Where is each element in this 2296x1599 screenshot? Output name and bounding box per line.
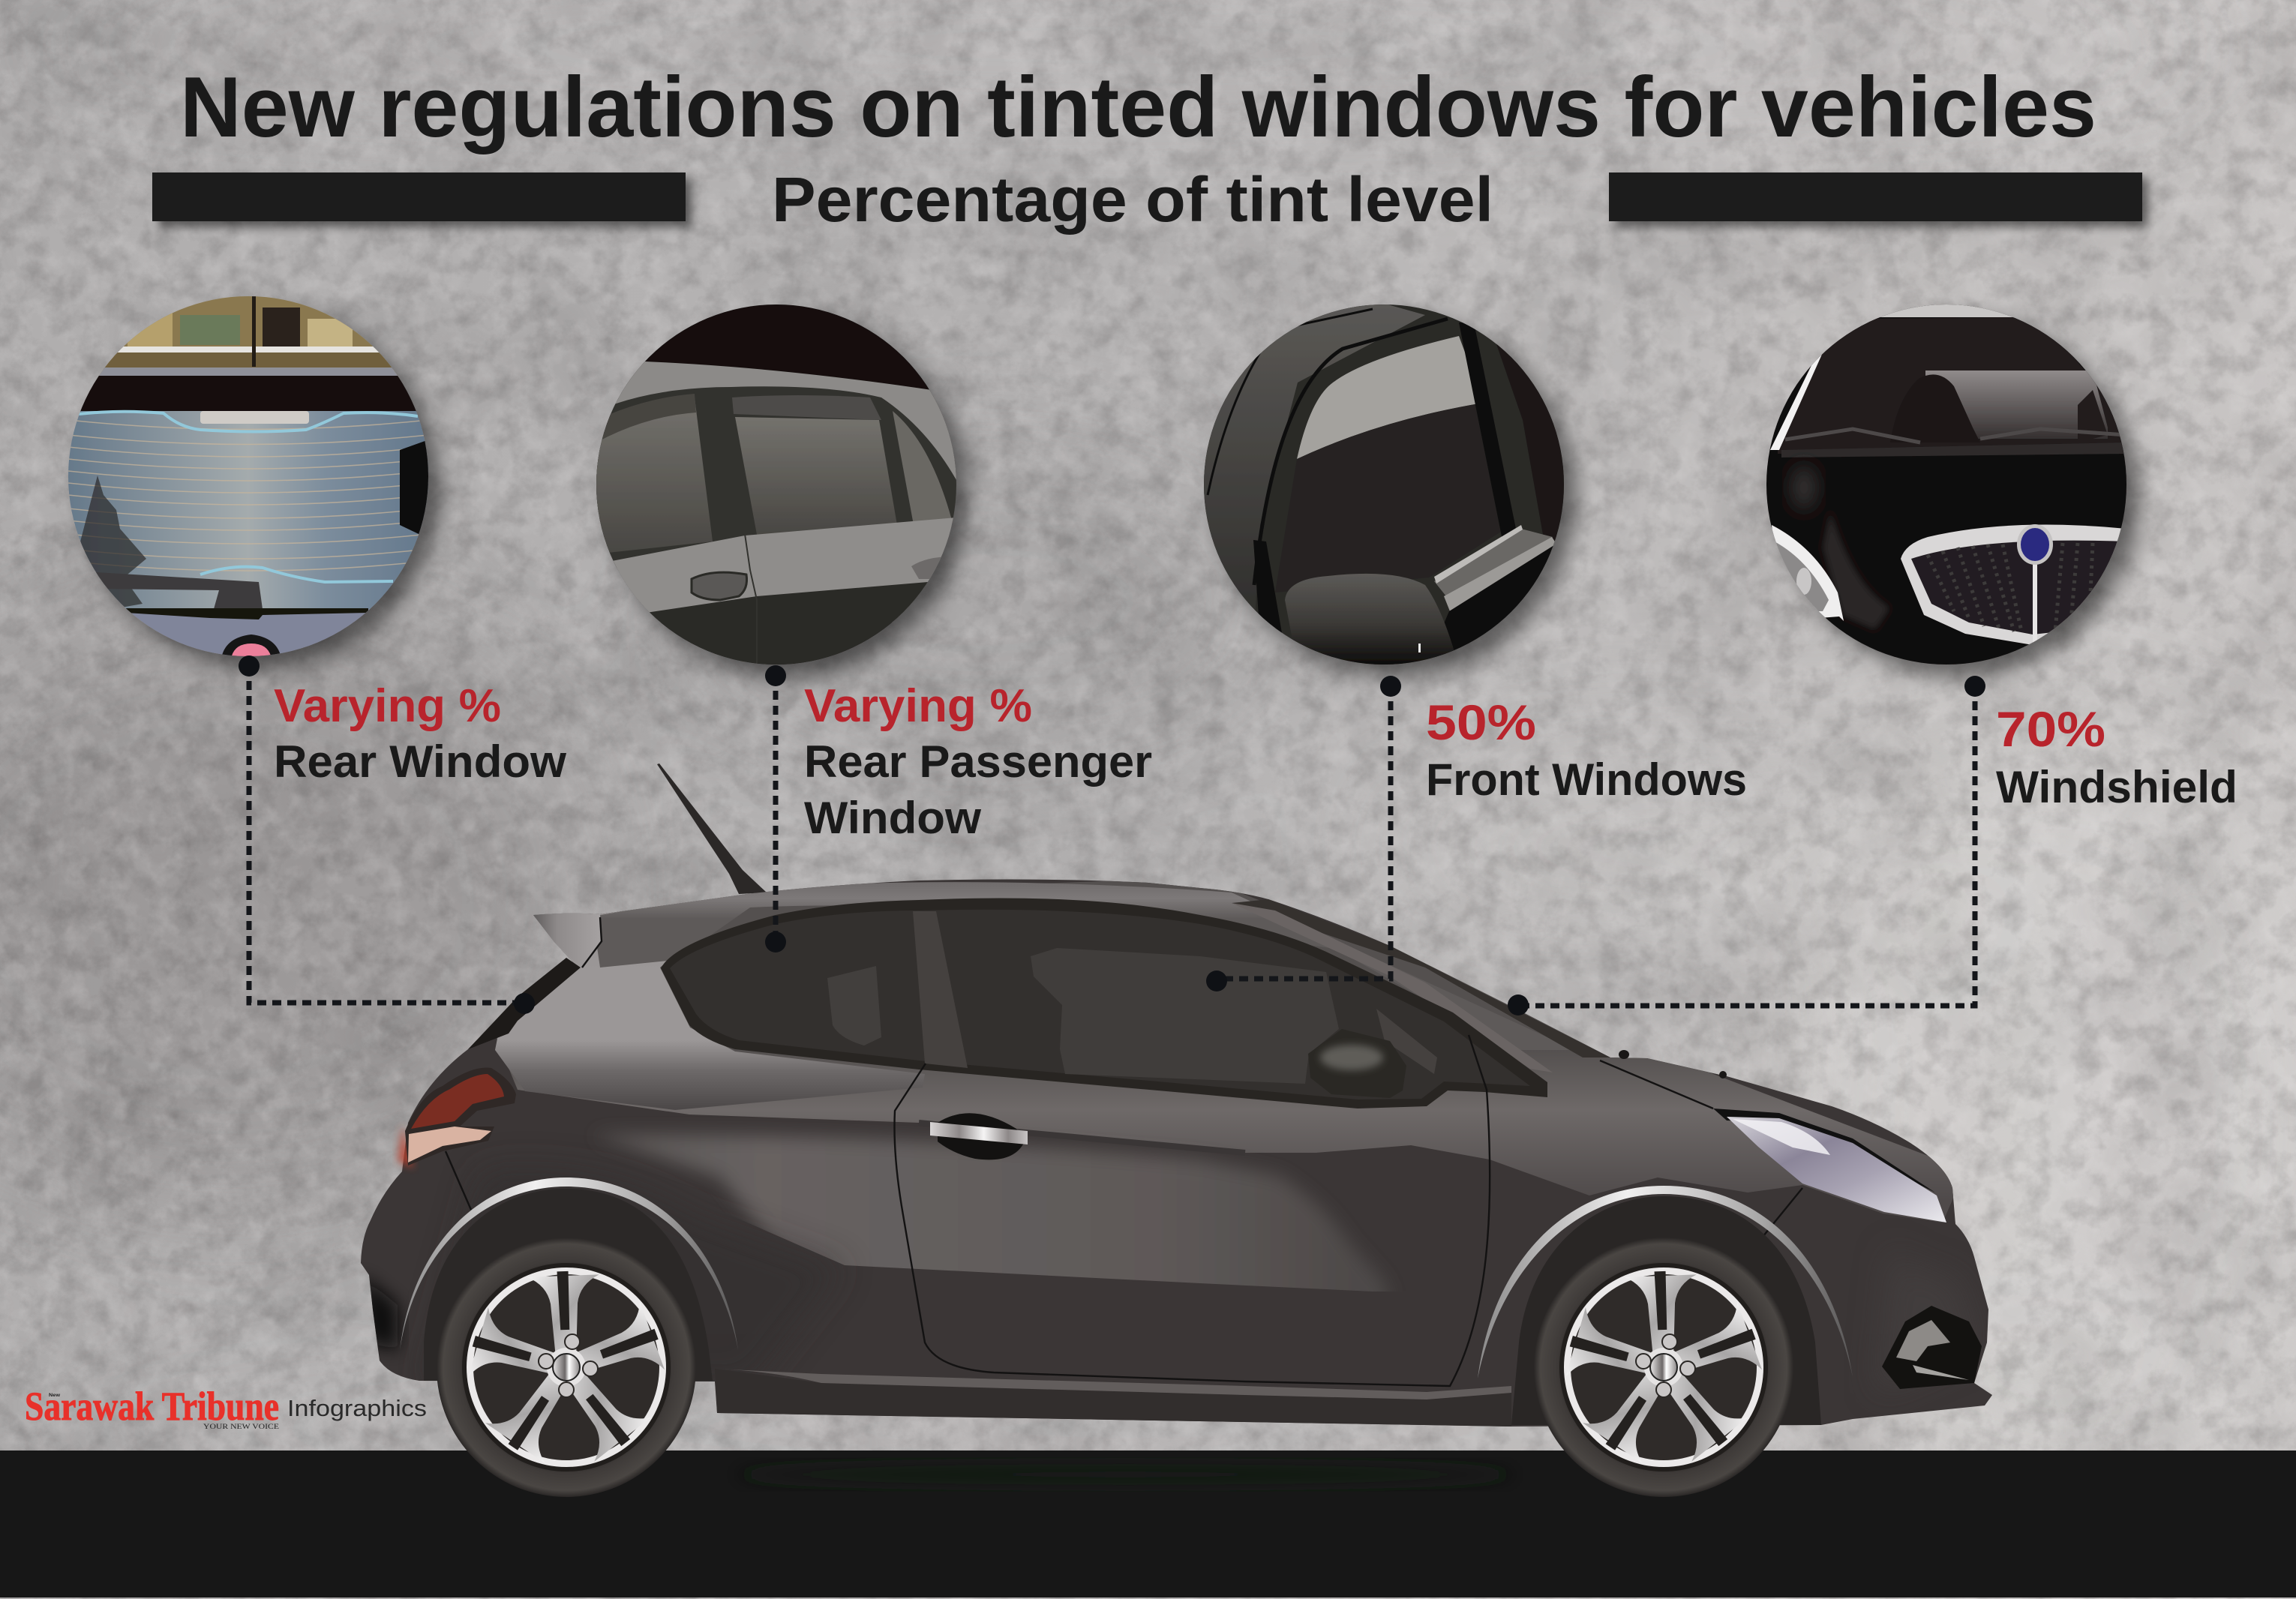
label: windshield: Windshield	[1996, 762, 2237, 812]
label: rear window	[274, 680, 566, 787]
left heading bar	[152, 172, 686, 221]
hood bumps	[1619, 1050, 1727, 1078]
logo: Sarawak Tribune Infographics: Sarawak Tribune	[25, 1384, 279, 1429]
label: windshield: 70%	[1996, 701, 2105, 757]
door handle	[930, 1113, 1028, 1160]
label: rear passenger window: Varying %	[804, 680, 1032, 732]
label: rear passenger window: Rear Passenger	[804, 736, 1152, 787]
label: rear passenger window	[804, 680, 1152, 843]
window glass	[670, 910, 1530, 1100]
label: rear window: Varying %	[274, 680, 501, 732]
logo: Sarawak Tribune Infographics: New	[49, 1394, 60, 1398]
door and panel lines	[446, 917, 1802, 1386]
body panels	[353, 870, 2003, 1432]
connector: front window leader	[1217, 686, 1391, 979]
b-pillar	[913, 911, 968, 1068]
connector dots	[239, 656, 1985, 1016]
quarter glass	[1376, 1009, 1437, 1074]
front seat	[1031, 948, 1339, 1084]
headlight	[1713, 1108, 1946, 1222]
front wheel arch	[1478, 1186, 1853, 1425]
photo: rear window	[68, 296, 431, 658]
spoiler	[533, 914, 602, 969]
window frame	[661, 898, 1547, 1108]
rear window sliver	[468, 958, 581, 1049]
mirror	[1308, 1029, 1406, 1098]
connector: rear passenger leader	[773, 676, 779, 942]
label: front windows: Front Windows	[1426, 754, 1747, 805]
label: front windows	[1426, 694, 1747, 805]
connector: rear window leader	[249, 666, 524, 1003]
ground band	[0, 1450, 2296, 1598]
title: New regulations on tinted windows for vehicles	[180, 60, 2096, 155]
subtitle: Percentage of tint level	[772, 164, 1493, 235]
right heading bar	[1609, 172, 2142, 221]
rear wheel arch	[400, 1178, 738, 1381]
antenna	[657, 764, 767, 894]
photo: rear passenger window	[596, 304, 956, 675]
car body	[353, 870, 2003, 1432]
logo: Sarawak Tribune Infographics: YOUR NEW VOICE	[203, 1423, 280, 1430]
logo: Sarawak Tribune Infographics: Infographics	[287, 1395, 427, 1421]
photo: windshield and grille	[1766, 303, 2126, 664]
photo: front window	[1204, 304, 1568, 668]
label: rear passenger window: Window	[804, 793, 981, 843]
rear wheel	[437, 1238, 696, 1497]
side sill	[715, 1369, 1511, 1426]
rear seat	[827, 966, 881, 1046]
label: windshield	[1996, 701, 2237, 812]
tail lamp	[398, 1068, 516, 1168]
fog lamp	[1882, 1306, 1982, 1389]
front wheel	[1534, 1238, 1793, 1497]
label: rear window: Rear Window	[274, 736, 566, 787]
connector: windshield leader	[1518, 686, 1975, 1006]
label: front windows: 50%	[1426, 694, 1536, 750]
